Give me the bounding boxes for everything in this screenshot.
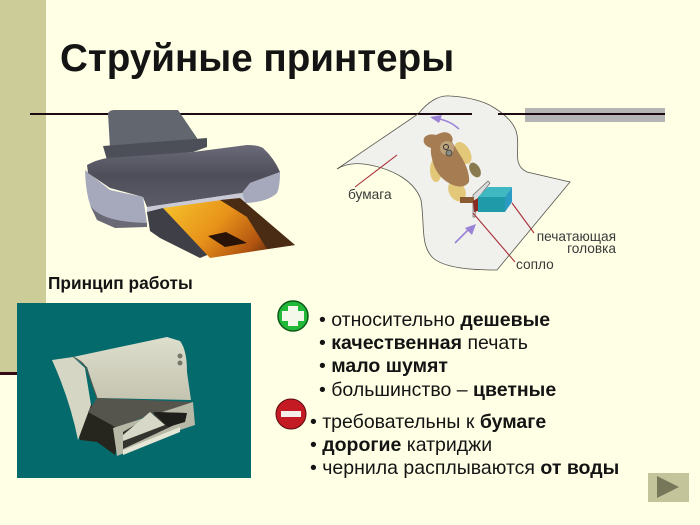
motion arrow top (432, 118, 459, 129)
label: nozzle: сопло (516, 257, 554, 272)
red leader lines (355, 155, 534, 262)
right shell (242, 172, 280, 203)
motion arrow bottom (455, 226, 472, 243)
header rule with gray bar (30, 108, 665, 122)
icon: plus (278, 301, 308, 331)
pro 3: • мало шумят (319, 355, 448, 377)
print head (460, 181, 512, 217)
icon: minus (276, 399, 306, 429)
output tray (147, 208, 212, 258)
con 3: • чернила расплываются от воды (310, 457, 619, 479)
front (113, 402, 195, 456)
label: paper: бумага (348, 187, 392, 202)
printed photo (163, 200, 295, 258)
label: print head line 2: головка (567, 241, 616, 256)
left wing (52, 357, 91, 440)
pros list (319, 309, 556, 401)
caption: working principle: Принцип работы (48, 273, 193, 293)
dark side (54, 364, 122, 455)
pro 1: • относительно дешевые (319, 309, 550, 331)
left sidebar band (0, 0, 46, 372)
next slide button (648, 473, 689, 502)
sidebar dark rule (0, 372, 18, 375)
title: Струйные принтеры (60, 37, 454, 80)
bear printed on paper (424, 132, 483, 205)
paper in tray (123, 412, 165, 441)
pro 4: • большинство – цветные (319, 379, 556, 401)
con 1: • требовательны к бумаге (310, 411, 546, 433)
paper support (108, 110, 198, 148)
con 2: • дорогие катриджи (310, 434, 492, 456)
tray recess (88, 398, 193, 428)
label: print head: печатающая (537, 229, 616, 244)
cover (73, 337, 191, 400)
left shell (85, 170, 147, 225)
centre band (147, 193, 245, 215)
rule visible across paper (418, 113, 526, 115)
buttons (178, 354, 182, 358)
paper sheet (337, 96, 570, 270)
illustration: office printer on teal panel (17, 303, 251, 478)
opening (123, 412, 185, 449)
illustration: photo inkjet printer (85, 110, 295, 258)
top cover (87, 145, 280, 207)
pro 2: • качественная печать (319, 332, 528, 354)
diagram: print head on paper (337, 96, 616, 272)
cons list (310, 411, 619, 479)
